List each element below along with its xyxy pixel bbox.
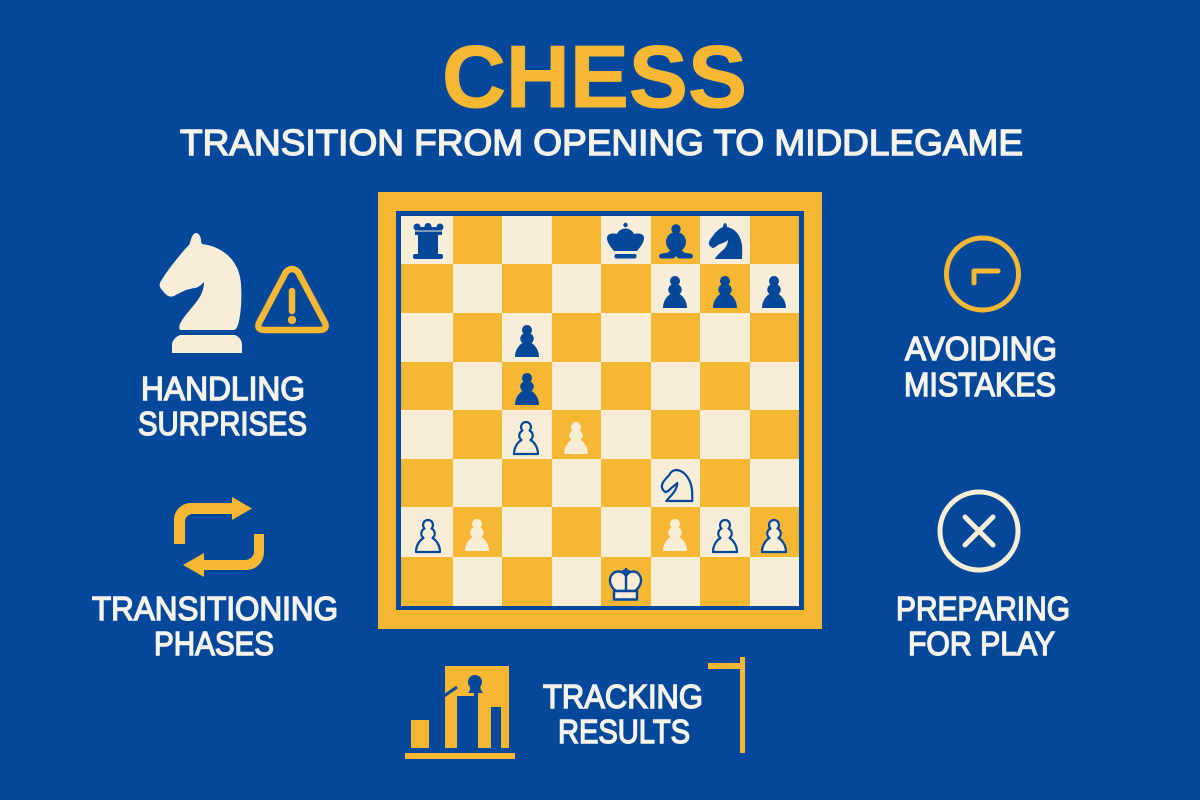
white cream pawns xyxy=(465,422,687,551)
panel: handling surprises xyxy=(138,233,326,442)
title: CHESS xyxy=(442,27,747,126)
icon: clock circle xyxy=(946,238,1018,310)
panel: preparing for play xyxy=(896,492,1070,662)
label xyxy=(92,590,338,662)
label: TRANSITIONING xyxy=(92,590,338,627)
icon: x circle xyxy=(940,492,1018,570)
chess board xyxy=(378,192,822,629)
label xyxy=(138,370,307,442)
black bishop xyxy=(659,224,693,258)
label: HANDLING xyxy=(141,370,305,407)
label: AVOIDING xyxy=(905,330,1057,367)
black knight xyxy=(709,223,742,259)
label xyxy=(904,330,1057,403)
label xyxy=(896,590,1070,662)
icon: cycle arrows xyxy=(174,497,264,577)
black king xyxy=(607,223,644,258)
black rook xyxy=(413,223,444,259)
panel: tracking results xyxy=(405,657,745,759)
label: RESULTS xyxy=(558,713,690,750)
icon: bar chart xyxy=(405,666,515,759)
label xyxy=(543,678,703,750)
panel: transitioning phases xyxy=(92,497,338,662)
label: SURPRISES xyxy=(138,405,307,442)
label: MISTAKES xyxy=(904,366,1056,403)
label: TRACKING xyxy=(543,678,703,715)
icon: warning triangle xyxy=(258,269,326,330)
panel: avoiding mistakes xyxy=(904,238,1057,403)
black pawns xyxy=(515,276,786,405)
label: PHASES xyxy=(154,625,274,662)
white knight xyxy=(662,470,692,501)
label: FOR PLAY xyxy=(908,625,1055,662)
icon: flag post xyxy=(708,657,745,753)
white outlined pawns xyxy=(416,422,786,552)
subtitle: TRANSITION FROM OPENING TO MIDDLEGAME xyxy=(180,122,1023,163)
label: PREPARING xyxy=(896,590,1070,627)
icon: knight xyxy=(160,233,242,353)
white king xyxy=(610,568,641,600)
